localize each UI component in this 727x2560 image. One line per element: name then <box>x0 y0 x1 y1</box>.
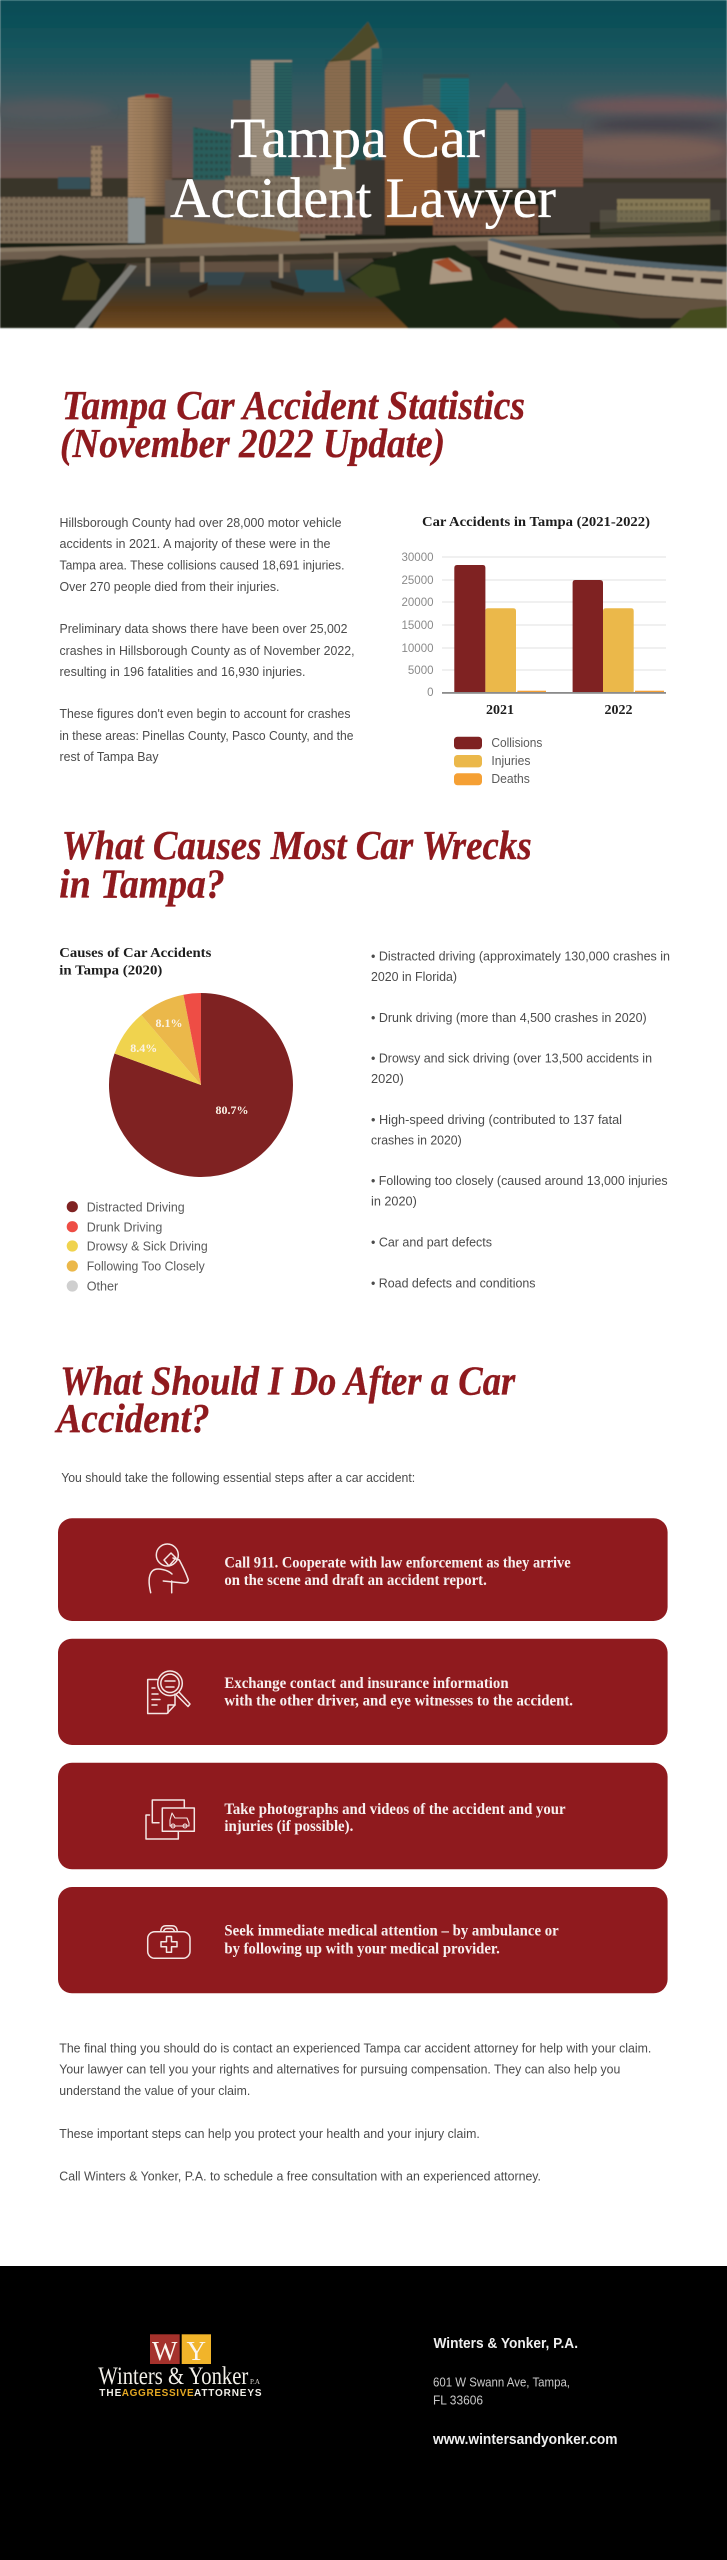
logo: Winters & Yonker: Winters & Yonker <box>98 2363 249 2390</box>
logo: Winters & Yonker: ATTORNEYS <box>194 2388 262 2399</box>
heading: What Causes Most Car Wrecks: What Causes Most Car Wrecks <box>62 822 532 868</box>
hero banner: Tampa skyline photo <box>0 0 727 328</box>
chart legend <box>454 735 543 786</box>
statistics text block: Over 270 people died from their injuries. <box>60 580 280 594</box>
pie chart: Causes of Car Accidents: 8.1% <box>156 1016 182 1030</box>
closing text block: Your lawyer can tell you your rights and alternatives for pursuing compensation. They can also help you <box>59 2063 620 2077</box>
logo: Winters & Yonker: AGGRESSIVE <box>122 2388 194 2399</box>
icon: person on phone <box>149 1544 188 1593</box>
statistics text block: crashes in Hillsborough County as of November 2022, <box>60 644 354 658</box>
step card: take photographs <box>58 1763 668 1869</box>
step text: by following up with your medical provider. <box>224 1940 500 1957</box>
pie legend: Drunk Driving <box>87 1220 162 1234</box>
bar chart: Car Accidents in Tampa 2021-2022: 30000 <box>402 552 434 564</box>
heading: Tampa Car Accident Statistics <box>60 382 525 466</box>
step text <box>224 1554 571 1589</box>
heading: What Should I Do After a Car Accident: Accident? <box>54 1395 210 1441</box>
hero title <box>170 107 556 230</box>
step card: seek medical attention <box>58 1887 668 1993</box>
step card: exchange information <box>58 1639 668 1745</box>
logo: Winters & Yonker: THE <box>99 2388 122 2399</box>
hero title: Tampa Car <box>230 107 485 170</box>
heading: What Causes Most Car Wrecks: in Tampa? <box>59 861 225 907</box>
statistics text block: accidents in 2021. A majority of these were in the <box>60 537 331 551</box>
footer <box>0 2266 727 2560</box>
bar chart: Car Accidents in Tampa 2021-2022: 20000 <box>402 597 434 609</box>
bar chart: Car Accidents in Tampa 2021-2022: 2022 <box>604 703 632 718</box>
step text: Seek immediate medical attention – by ambulance or <box>224 1923 559 1940</box>
closing text block: The final thing you should do is contact an experienced Tampa car accident attorney for help with your claim. <box>59 2041 651 2055</box>
list of causes: • High-speed driving (contributed to 137 fatal <box>371 1113 622 1127</box>
pie legend <box>67 1200 208 1294</box>
pie title <box>59 946 212 979</box>
step text: Exchange contact and insurance information <box>224 1675 509 1692</box>
list of causes: • Drunk driving (more than 4,500 crashes in 2020) <box>371 1011 647 1025</box>
chart legend: Injuries <box>491 753 531 768</box>
logo: Winters & Yonker: P.A <box>250 2378 260 2386</box>
statistics text block: Hillsborough County had over 28,000 motor vehicle <box>60 516 342 530</box>
pie title: in Tampa (2020) <box>59 964 163 979</box>
pie legend: Following Too Closely <box>87 1258 205 1274</box>
pie legend: Other <box>87 1278 119 1294</box>
statistics text block: rest of Tampa Bay <box>60 750 159 764</box>
footer contact details: FL 33606 <box>433 2394 483 2408</box>
icon: first aid kit <box>148 1926 190 1958</box>
statistics text block: resulting in 196 fatalities and 16,930 injuries. <box>60 665 306 679</box>
pie legend: Distracted Driving <box>87 1200 185 1214</box>
chart legend: Deaths <box>491 771 530 786</box>
bar chart: Car Accidents in Tampa 2021-2022: 5000 <box>408 665 434 677</box>
logo: Winters & Yonker: Y <box>187 2336 206 2366</box>
list of causes: • Car and part defects <box>371 1236 492 1250</box>
heading: Tampa Car Accident Statistics: (November 2022 Update) <box>60 420 445 466</box>
pie chart: Causes of Car Accidents: 80.7% <box>216 1103 248 1117</box>
logo: Winters & Yonker <box>98 2334 262 2399</box>
heading: What Should I Do After a Car Accident: What Should I Do After a Car <box>60 1357 516 1403</box>
bar chart: Car Accidents in Tampa 2021-2022: 15000 <box>402 620 434 632</box>
statistics text block: Preliminary data shows there have been over 25,002 <box>60 622 348 636</box>
pie legend: Drowsy & Sick Driving <box>87 1238 208 1254</box>
footer contact details: Winters & Yonker, P.A. <box>434 2336 578 2352</box>
footer contact details: 601 W Swann Ave, Tampa, <box>433 2376 570 2390</box>
closing text block: These important steps can help you protect your health and your injury claim. <box>59 2127 480 2141</box>
heading: What Should I Do After a Car Accident <box>54 1357 516 1441</box>
list of causes: • Road defects and conditions <box>371 1276 536 1290</box>
logo: Winters & Yonker: W <box>152 2336 178 2366</box>
closing text block: understand the value of your claim. <box>59 2084 250 2098</box>
step text: with the other driver, and eye witnesses to the accident. <box>224 1692 573 1709</box>
footer contact details: www.wintersandyonker.com <box>432 2432 618 2448</box>
chart title: Car Accidents in Tampa (2021-2022) <box>422 515 650 530</box>
heading: What Causes Most Car Wrecks <box>59 822 532 907</box>
step card: call 911 <box>58 1518 668 1621</box>
bar chart: Car Accidents in Tampa 2021-2022: 2021 <box>486 703 514 718</box>
step text <box>224 1923 559 1957</box>
hero title: Accident Lawyer <box>170 167 556 230</box>
chart legend: Collisions <box>491 735 543 750</box>
bar chart: Car Accidents in Tampa 2021-2022: 10000 <box>402 643 434 655</box>
intro line: You should take the following essential steps after a car accident: <box>61 1471 415 1485</box>
pie chart: Causes of Car Accidents <box>59 946 293 1294</box>
bar chart: Car Accidents in Tampa 2021-2022: 0 <box>427 687 434 699</box>
step text <box>224 1801 566 1835</box>
step text: injuries (if possible). <box>224 1818 353 1835</box>
icon: document and magnifier <box>148 1671 190 1714</box>
step text: Call 911. Cooperate with law enforcement as they arrive <box>224 1554 571 1571</box>
list of causes: 2020 in Florida) <box>371 970 457 984</box>
list of causes: • Drowsy and sick driving (over 13,500 accidents in <box>371 1052 652 1066</box>
footer contact details <box>432 2336 618 2448</box>
bar chart: Car Accidents in Tampa 2021-2022 <box>402 515 666 786</box>
step text: on the scene and draft an accident report. <box>224 1572 487 1589</box>
list of causes: in 2020) <box>371 1195 417 1209</box>
pie chart: Causes of Car Accidents: 8.4% <box>130 1041 157 1055</box>
statistics text block: These figures don't even begin to account for crashes <box>60 707 350 721</box>
list of causes: crashes in 2020) <box>371 1133 462 1147</box>
bar chart: Car Accidents in Tampa 2021-2022: 25000 <box>402 575 434 587</box>
list of causes: • Following too closely (caused around 13,000 injuries <box>371 1174 668 1188</box>
list of causes <box>371 950 670 1290</box>
closing text block <box>59 2041 651 2184</box>
icon: photographs of a vehicle <box>146 1800 194 1839</box>
step text <box>224 1675 573 1709</box>
statistics text block: in these areas: Pinellas County, Pasco County, and the <box>60 729 354 743</box>
statistics text block <box>60 516 354 764</box>
step text: Take photographs and videos of the accident and your <box>224 1801 566 1818</box>
closing text block: Call Winters & Yonker, P.A. to schedule a free consultation with an experienced attorney. <box>59 2170 541 2184</box>
statistics text block: Tampa area. These collisions caused 18,691 injuries. <box>60 558 344 572</box>
pie title: Causes of Car Accidents <box>59 946 212 961</box>
list of causes: 2020) <box>371 1072 404 1086</box>
list of causes: • Distracted driving (approximately 130,000 crashes in <box>371 950 670 964</box>
heading: Tampa Car Accident Statistics: Tampa Car Accident Statistics <box>62 382 525 428</box>
